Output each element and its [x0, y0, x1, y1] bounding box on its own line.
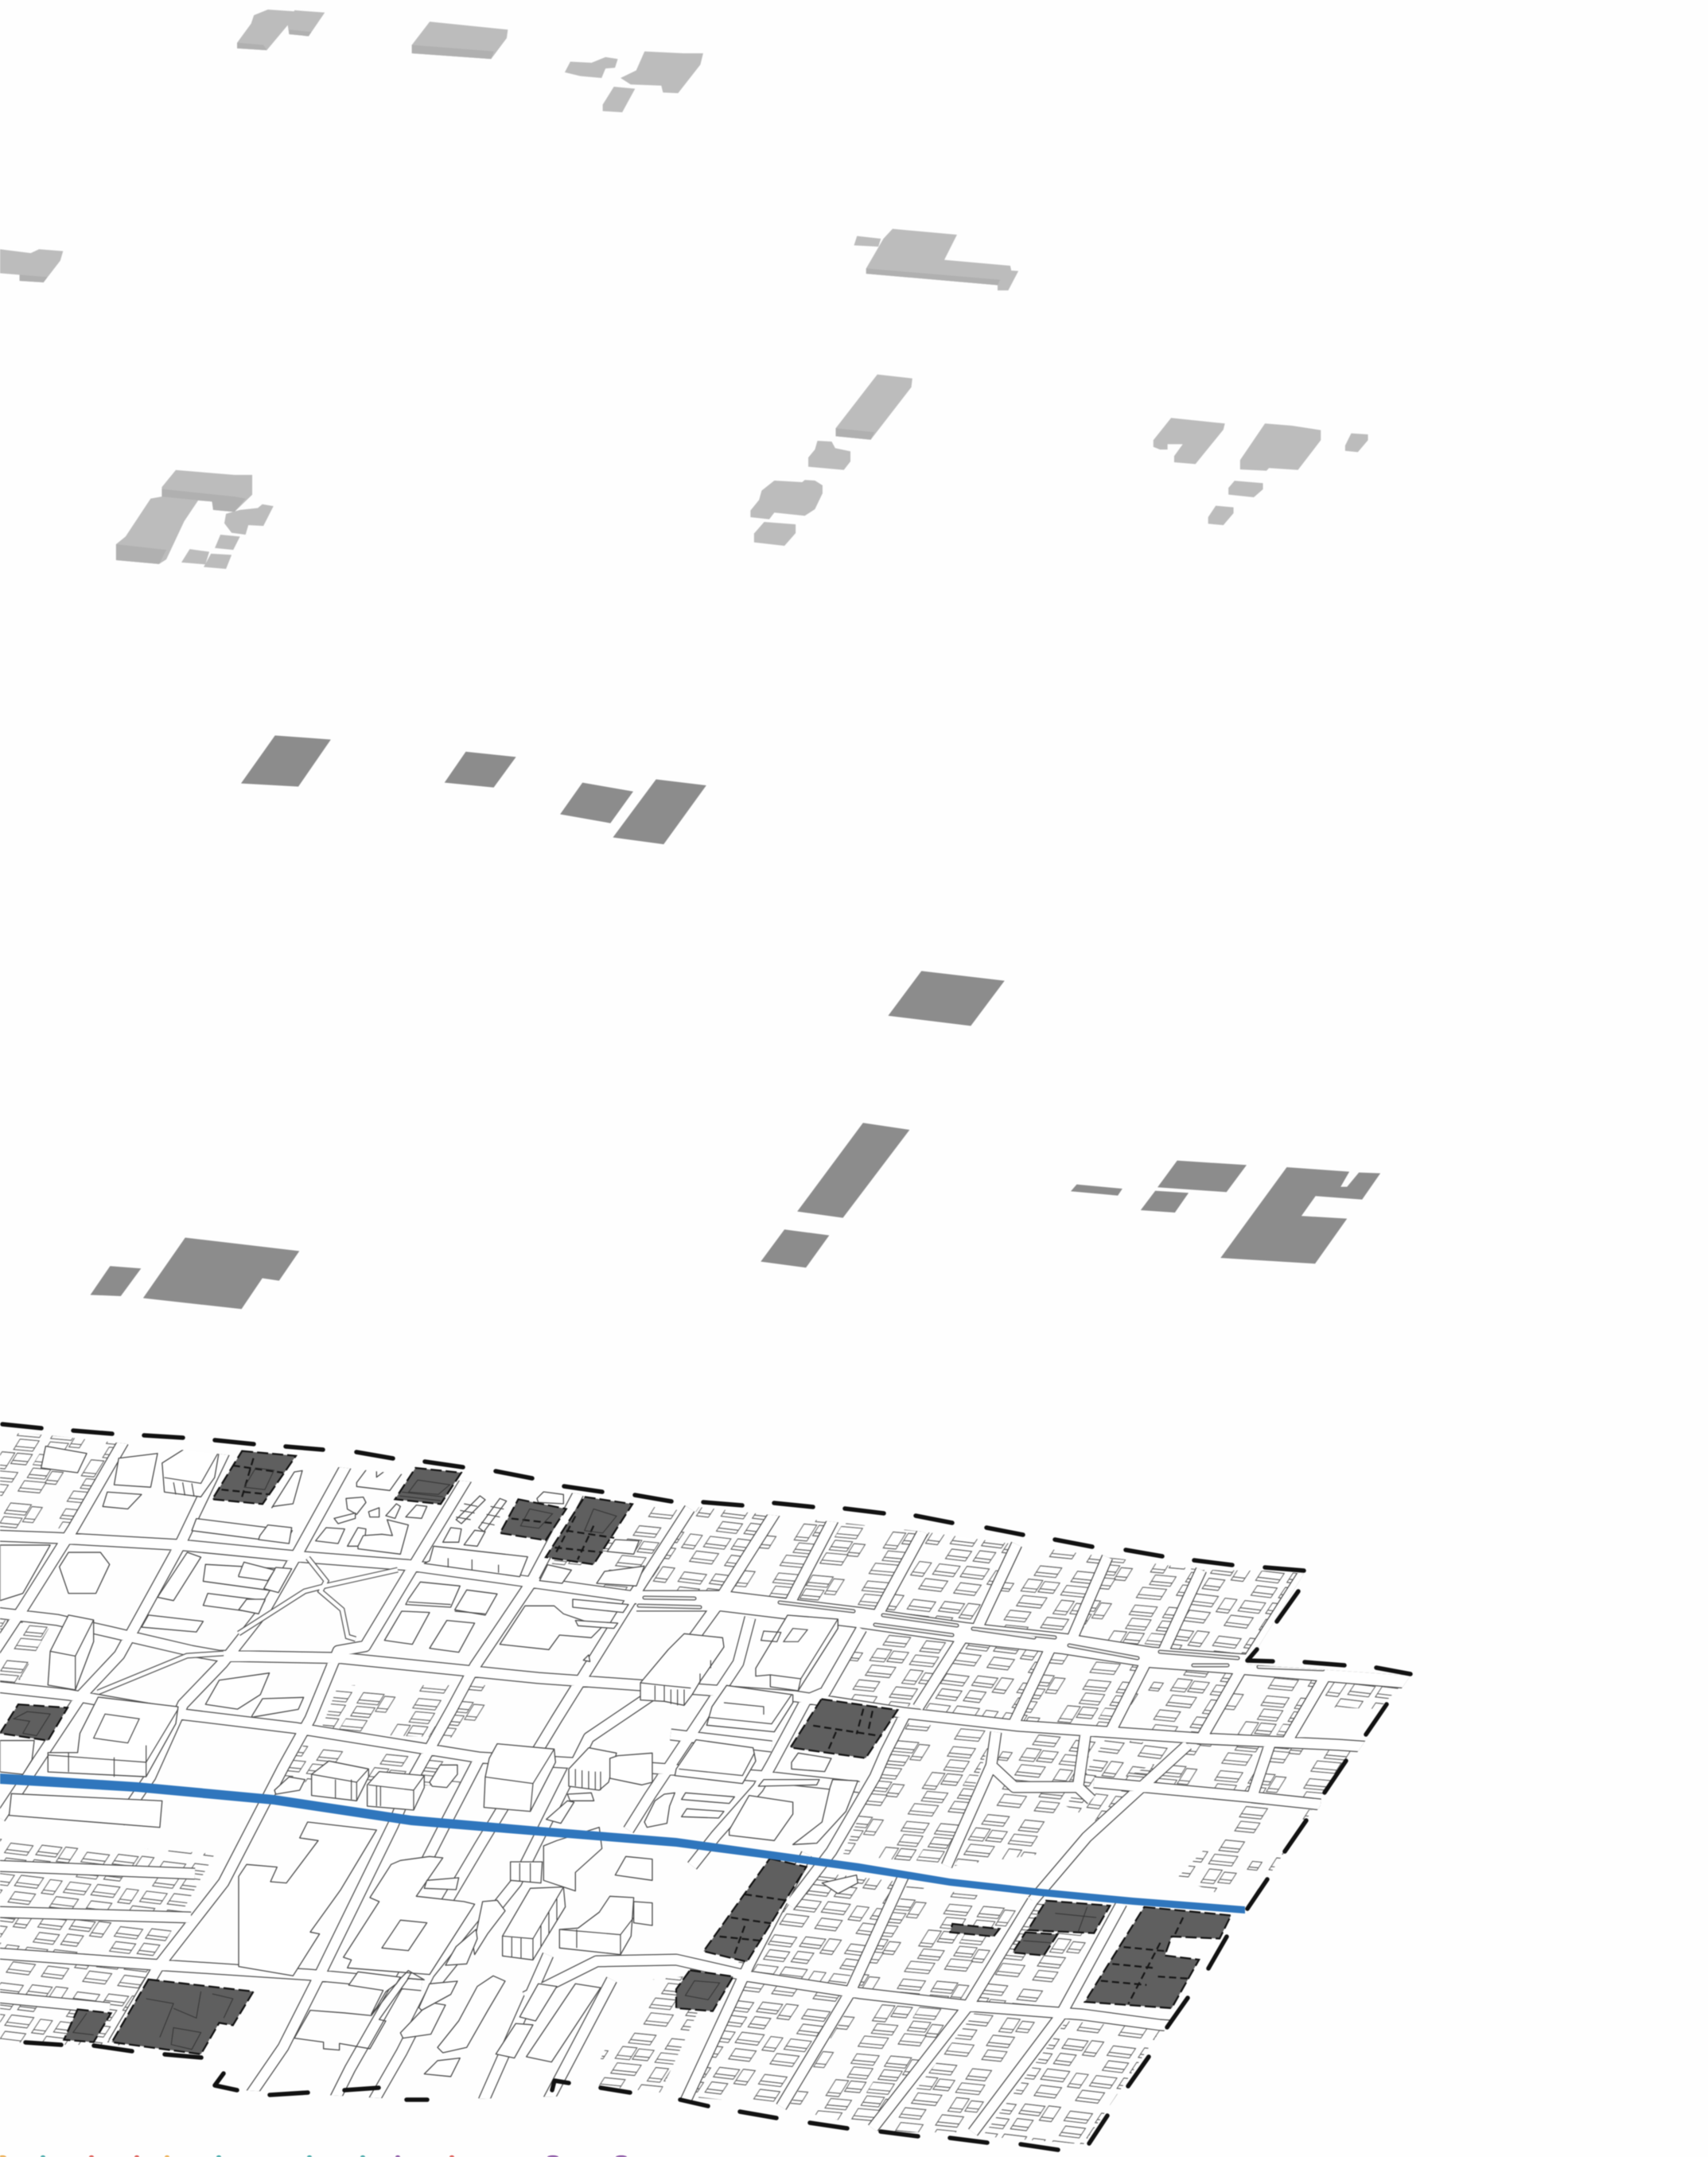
building group: far right cluster — [1154, 418, 1368, 525]
building group: top left — [237, 10, 325, 50]
dashed site boundary — [2, 1424, 1410, 2150]
layer: ground plan street map — [0, 1432, 1416, 2144]
street network — [0, 1442, 1416, 2132]
layer: mid grey building footprints — [91, 735, 1380, 1309]
building group: left edge — [0, 249, 63, 282]
residential house fabric — [0, 1432, 1410, 2144]
layer: upper light grey building massing — [0, 10, 1368, 569]
building group: campus lower left — [116, 470, 274, 569]
buildings: central blocks around the corridor — [239, 1697, 652, 2077]
footprints: right group — [761, 971, 1380, 1267]
buildings: east of centre — [640, 1615, 858, 1894]
corridor: blue line — [0, 1773, 1245, 1914]
parcels: east side — [676, 1699, 1231, 2011]
buildings: western blocks — [0, 1446, 292, 1828]
cropped label tops along the bottom edge — [0, 2155, 627, 2157]
building group: linear stack centre right — [750, 375, 912, 546]
footprints: left group — [91, 735, 706, 1309]
building: top centre slab — [412, 21, 508, 59]
building group: top right cluster — [565, 52, 703, 112]
parcels: west side — [0, 1451, 632, 2054]
buildings: northern blocks — [239, 1466, 644, 1661]
building: L-shaped block upper right — [854, 229, 1018, 290]
dark highlighted parcels — [0, 1451, 1231, 2054]
